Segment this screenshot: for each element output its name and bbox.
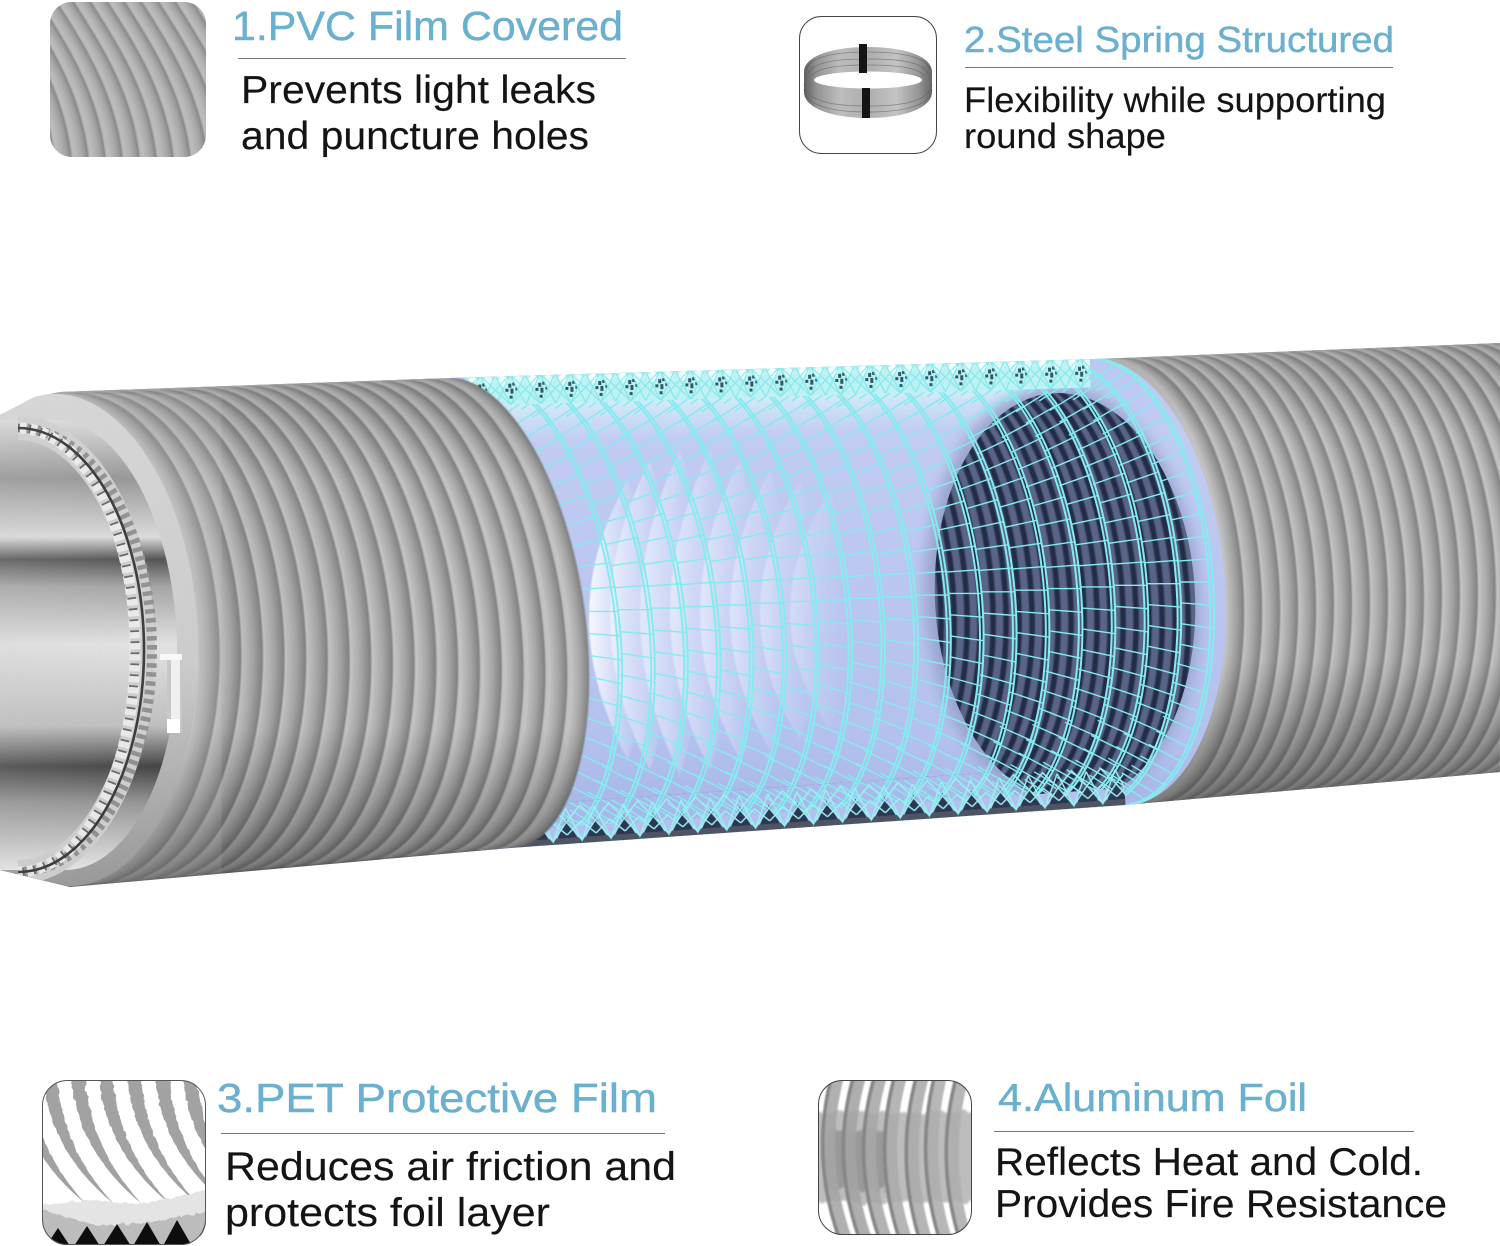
left section: grey PVC ribs — [0, 378, 615, 892]
heading: 2.Steel Spring Structured — [964, 19, 1394, 60]
hose clamp teeth — [18, 428, 152, 872]
body text — [225, 1145, 676, 1235]
icon: PVC film ribs — [50, 2, 206, 157]
right section: grey PVC ribs — [1072, 343, 1500, 809]
heading: 4.Aluminum Foil — [998, 1077, 1307, 1120]
cyan steel wire mesh — [473, 359, 1228, 846]
mesh zigzag top edge — [465, 357, 1091, 406]
icon: aluminum foil — [818, 1080, 972, 1235]
body text: Flexibility while supporting — [964, 80, 1386, 120]
panel: feature 3 PET film — [15, 1075, 676, 1246]
body text — [964, 80, 1386, 156]
body text: Provides Fire Resistance — [995, 1183, 1447, 1226]
body text: protects foil layer — [225, 1191, 550, 1235]
panel: feature 2 steel spring — [800, 16, 1394, 156]
body text: and puncture holes — [241, 115, 589, 158]
body text: Reduces air friction and — [225, 1145, 676, 1189]
panel: duct cutaway illustration — [0, 330, 1500, 900]
panel: feature 4 aluminum foil — [810, 1077, 1447, 1238]
body text — [995, 1141, 1447, 1226]
icon: steel spring ring — [800, 16, 936, 154]
heading: 1.PVC Film Covered — [232, 3, 623, 49]
transparent blue PET layer — [175, 359, 1240, 852]
duct end ring face — [0, 394, 206, 886]
clamp latch — [160, 654, 182, 733]
panel: feature 1 PVC film — [50, 2, 626, 158]
body text: round shape — [964, 116, 1166, 156]
inner steel pipe — [0, 437, 107, 867]
heading: 3.PET Protective Film — [217, 1075, 657, 1121]
inner rib highlights — [588, 454, 824, 774]
body text: Reflects Heat and Cold. — [995, 1141, 1423, 1184]
body text: Prevents light leaks — [241, 69, 596, 112]
metal collar — [0, 420, 182, 870]
body text — [241, 69, 596, 158]
mesh zigzag bottom edge — [507, 763, 1125, 848]
icon: PET protective film — [42, 1080, 206, 1245]
far opening of the duct — [920, 388, 1204, 805]
